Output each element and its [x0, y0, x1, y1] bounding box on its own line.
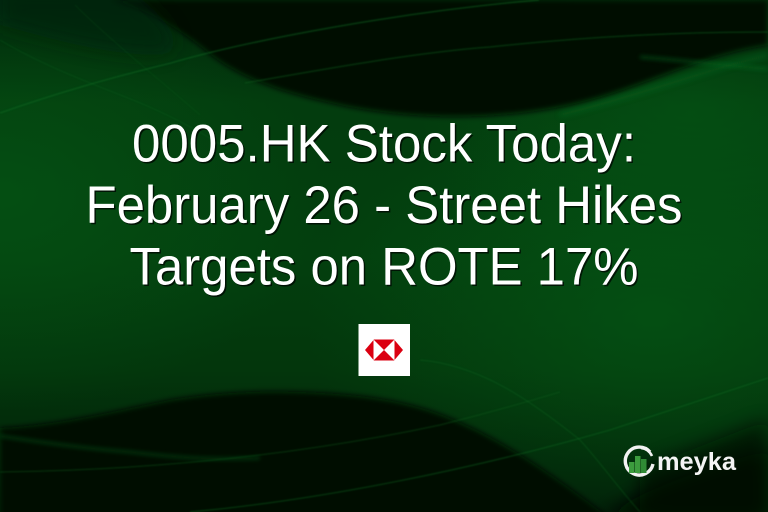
title: February 26 - Street Hikes: [86, 176, 682, 235]
title: Targets on ROTE 17%: [130, 238, 638, 296]
title: Targets on ROTE 17%: [131, 239, 640, 298]
title: 0005.HK Stock Today:: [134, 116, 638, 175]
logo: meyka: [625, 447, 737, 476]
wordmark: meyka: [657, 448, 737, 476]
title: 0005.HK Stock Today:: [132, 114, 636, 174]
title: [86, 114, 684, 298]
title: February 26 - Street Hikes: [87, 178, 684, 236]
icon: meyka ring with bars: [625, 447, 653, 475]
icon: HSBC logo: [358, 324, 410, 376]
